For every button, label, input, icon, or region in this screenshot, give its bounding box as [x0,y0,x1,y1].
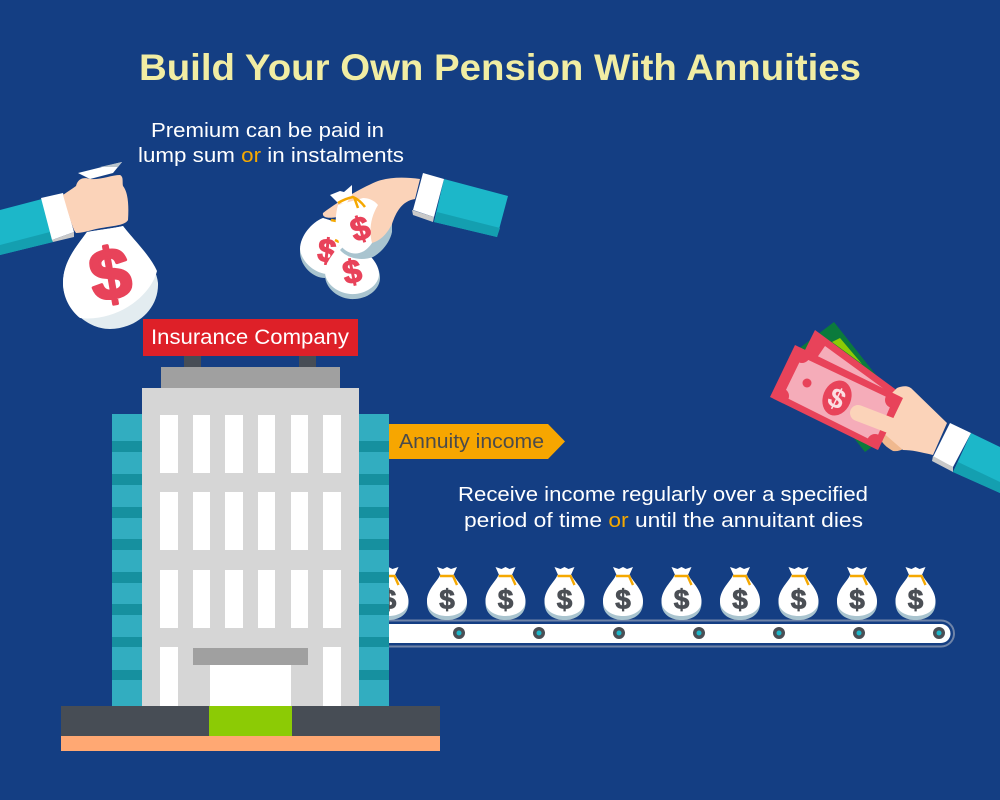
money bag 9: $ [849,584,865,615]
entrance door [210,665,291,706]
money bag 3: $ [498,584,514,615]
text: receive income: period of time or until the annuitant dies [464,510,863,532]
entrance awning [193,648,308,665]
text: receive income: Receive income regularly over a specified [458,484,868,506]
icon: right hand holding banknotes [770,322,1000,493]
sign posts [184,356,316,368]
pavement [61,736,440,751]
bag ties [331,220,339,242]
money bag 8 [778,567,818,620]
text: premium payment: lump sum or in instalments [138,145,404,167]
money bag 8: $ [791,584,807,615]
money bag 6: $ [674,584,690,615]
sign: insurance company [143,319,358,356]
money bag 6 [662,567,702,620]
left bag [300,218,345,278]
windows [160,415,341,706]
icon: middle hand dropping money bags [300,173,508,299]
text: receive income [458,484,868,532]
icon: left hand holding money bag [0,162,158,329]
money bag 4: $ [557,584,573,615]
money bag 10: $ [908,584,924,615]
icon: left hand holding money bag: $ [84,232,137,318]
money bag 5 [603,567,643,620]
icon: middle hand dropping money bags: $ [316,231,338,270]
money bag 10 [896,567,936,620]
base [61,706,440,736]
building body [142,388,359,706]
money bag 5: $ [615,584,631,615]
money bag 2: $ [439,584,455,615]
icon: middle hand dropping money bags: $ [339,251,365,291]
hand [323,178,420,243]
text: premium payment [138,120,404,167]
money bag 2 [427,567,467,620]
bottom bag [325,245,380,299]
text: premium payment: Premium can be paid in [151,120,384,142]
building side wings [112,414,389,706]
money bag 1 [368,567,408,620]
arrow label: annuity income: Annuity income [399,431,544,453]
money bag 9 [837,567,877,620]
money bag 1: $ [381,584,397,615]
top bag shadow [340,222,392,259]
icon: middle hand dropping money bags: $ [346,208,375,249]
conveyor belt [389,620,954,646]
money bag 7: $ [732,584,748,615]
arrow label: annuity income [389,424,565,459]
icon: right hand holding banknotes: $ [823,381,851,416]
doormat [209,706,292,736]
roof [161,367,340,388]
sign: insurance company: Insurance Company [151,326,350,349]
money bags on conveyor [368,567,936,620]
building: insurance company [61,356,440,751]
money bag 4 [544,567,584,620]
title: Build Your Own Pension With Annuities [139,47,861,88]
money bag 3 [486,567,526,620]
money bag 7 [720,567,760,620]
top bag [336,198,378,254]
